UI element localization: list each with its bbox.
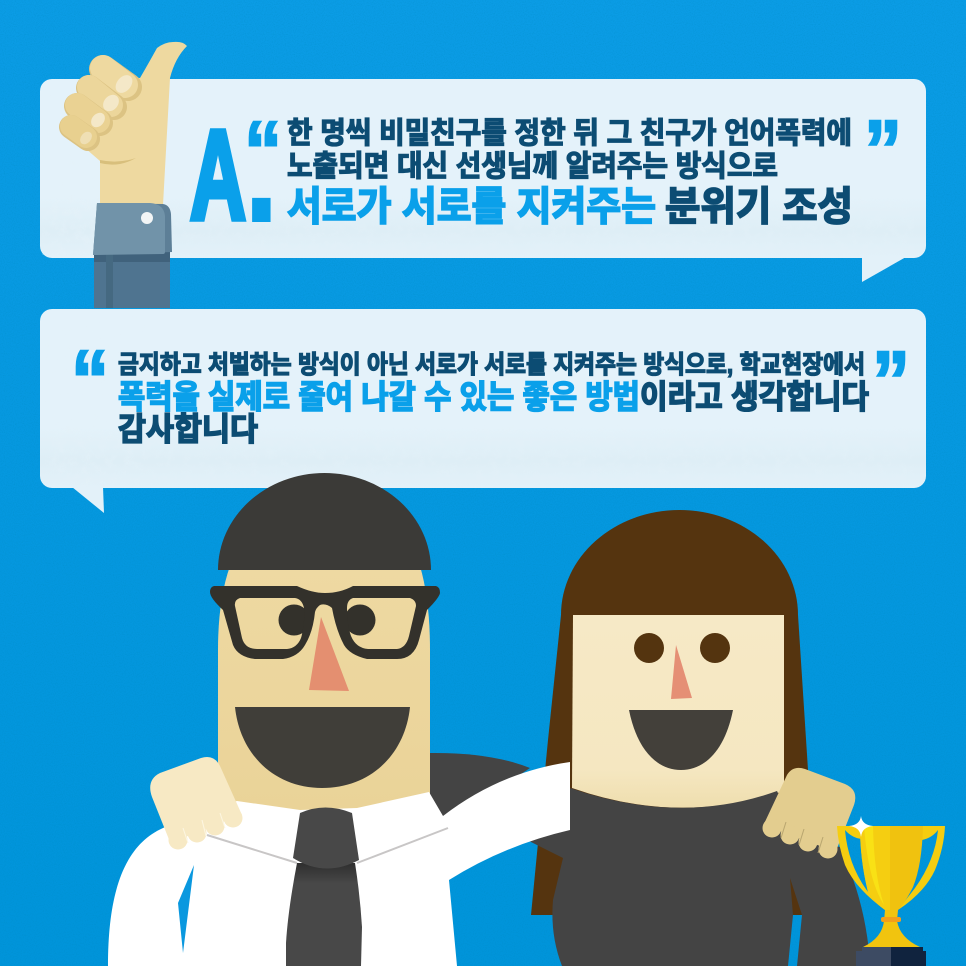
closing quote, lower bubble: ” [872, 334, 910, 428]
hair [218, 473, 431, 570]
sparkle [849, 816, 873, 837]
sleeve [94, 252, 170, 308]
top bubble text [287, 117, 853, 229]
line 3 highlight: 서로가 서로를 지켜주는 [287, 185, 656, 229]
shirt cuff [93, 203, 172, 255]
closing quote, top bubble: ” [864, 103, 902, 197]
line 1: 금지하고 처벌하는 방식이 아닌 서로가 서로를 지켜주는 방식으로, 학교현장에서 [118, 351, 865, 379]
head [218, 566, 430, 812]
woman figure [527, 510, 870, 966]
collar lines [207, 828, 448, 863]
opening quote, top bubble: “ [244, 104, 282, 198]
glasses [210, 586, 440, 659]
plinth [856, 947, 926, 966]
line 2 end: 이라고 생각합니다 [640, 379, 869, 415]
tie [286, 863, 362, 966]
tie knot [293, 808, 359, 869]
white shirt and arm [108, 762, 570, 966]
opening quote, lower bubble: “ [71, 333, 109, 427]
nose [671, 645, 692, 699]
lower bubble text [118, 351, 869, 447]
icon: thumbs up arm [71, 42, 187, 308]
line 3 end: 분위기 조성 [665, 185, 853, 229]
hand [71, 42, 187, 205]
mouth [235, 707, 410, 788]
stem [863, 910, 920, 947]
panel: top speech bubble [40, 79, 926, 282]
eyes [634, 633, 730, 663]
face [572, 615, 784, 808]
line 2 highlight: 폭력을 실제로 줄여 나갈 수 있는 좋은 방법 [118, 379, 640, 415]
man's hand [762, 768, 855, 858]
big letter A: A [190, 104, 246, 246]
man's arm behind [428, 753, 530, 825]
woman's hand [150, 757, 242, 850]
nose [309, 617, 349, 691]
line 2: 노출되면 대신 선생님께 알려주는 방식으로 [287, 150, 778, 183]
collar [881, 917, 901, 922]
mouth [629, 710, 733, 770]
shirt sleeve gap [178, 865, 194, 953]
cup [860, 826, 923, 910]
eyes [278, 604, 376, 636]
cuff button [141, 212, 153, 224]
handles [837, 826, 945, 910]
man figure [108, 473, 570, 966]
line 3: 감사합니다 [118, 411, 258, 447]
hair back [531, 510, 808, 915]
icon: trophy [837, 816, 945, 966]
line 1: 한 명씩 비밀친구를 정한 뒤 그 친구가 언어폭력에 [287, 117, 852, 150]
panel: lower speech bubble [40, 309, 926, 513]
woman body [527, 788, 870, 966]
big letter A: . [246, 98, 276, 249]
